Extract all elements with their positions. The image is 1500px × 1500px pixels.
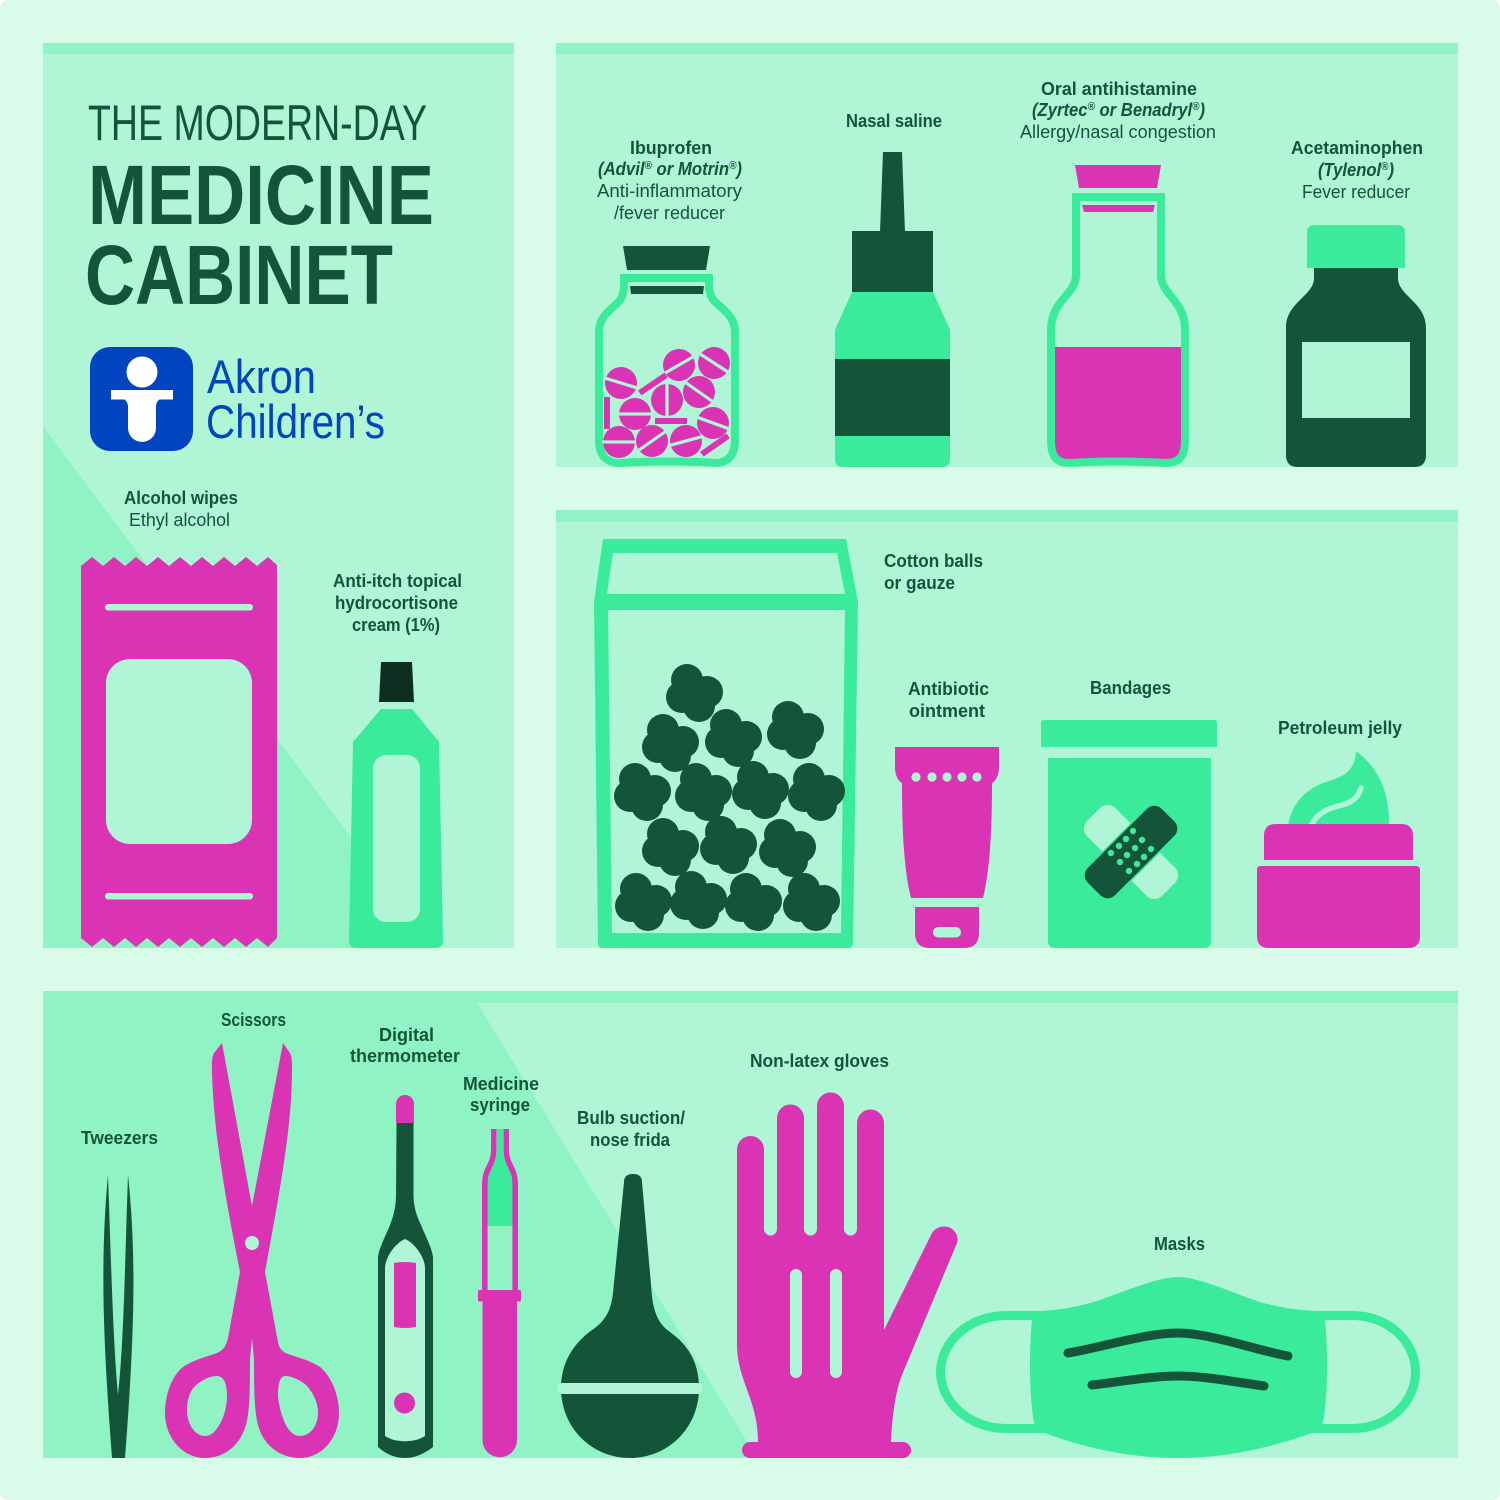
label: medicine syringe: syringe <box>470 1094 530 1115</box>
panel: medicines shelf <box>556 43 1458 467</box>
label: oral antihistamine: Oral antihistamine <box>1041 78 1197 99</box>
label: tweezers: Tweezers <box>81 1127 158 1148</box>
label: medicine syringe: Medicine <box>463 1073 539 1094</box>
icon: alcohol wipes packet <box>81 557 277 947</box>
icon: face mask <box>940 1277 1416 1458</box>
label: nasal saline: Nasal saline <box>846 110 942 131</box>
label: acetaminophen: ® <box>1381 161 1389 173</box>
label: oral antihistamine <box>1020 78 1216 142</box>
icon: pill jar <box>599 246 737 464</box>
icon: ointment tube <box>895 747 999 948</box>
label: oral antihistamine: ® <box>1192 101 1200 113</box>
panel: title and wipes <box>43 43 514 948</box>
label: oral antihistamine: or Benadryl <box>1095 99 1193 120</box>
label: anti-itch cream: cream (1%) <box>352 614 440 635</box>
label: acetaminophen: ) <box>1387 159 1394 180</box>
label: antibiotic ointment: ointment <box>909 700 985 721</box>
label: acetaminophen: Acetaminophen <box>1291 137 1423 158</box>
label: medicine syringe <box>463 1073 539 1115</box>
icon: hydrocortisone tube <box>349 662 443 948</box>
label: cotton balls <box>884 550 983 593</box>
label: oral antihistamine: (Zyrtec <box>1032 99 1094 120</box>
label: ibuprofen: ® <box>729 160 737 172</box>
label: alcohol wipes: Alcohol wipes <box>124 487 238 508</box>
panel: tools shelf <box>43 991 1458 1458</box>
label: anti-itch cream: Anti-itch topical <box>333 570 462 591</box>
label: digital thermometer: Digital <box>379 1024 434 1045</box>
panel: first-aid shelf <box>556 510 1458 948</box>
label: ibuprofen <box>597 137 743 223</box>
label: anti-itch cream <box>333 570 462 635</box>
icon: nasal saline bottle <box>835 152 950 467</box>
label: oral antihistamine: ) <box>1198 99 1205 120</box>
label: digital thermometer <box>350 1024 460 1066</box>
title: THE MODERN-DAY <box>88 95 427 151</box>
icon: tweezers <box>103 1175 133 1458</box>
label: bulb suction: nose frida <box>590 1129 671 1150</box>
label: alcohol wipes: Ethyl alcohol <box>129 509 230 530</box>
title: MEDICINE <box>88 148 434 242</box>
icon: bulb suction <box>557 1174 703 1458</box>
icon: cotton balls jar <box>594 539 858 948</box>
label: bulb suction: Bulb suction/ <box>577 1107 685 1128</box>
label: bandages: Bandages <box>1090 677 1171 698</box>
icon: antihistamine bottle <box>1051 165 1185 463</box>
icon: bandage box <box>1041 720 1217 948</box>
label: non-latex gloves: Non-latex gloves <box>750 1050 889 1071</box>
label: ibuprofen: Anti-inflammatory <box>597 180 743 201</box>
label: antibiotic ointment: Antibiotic <box>908 678 989 699</box>
logo: Akron Children's: Children’s <box>206 395 385 448</box>
logo: Akron Children's <box>90 347 385 451</box>
title <box>85 95 434 322</box>
icon: digital thermometer <box>378 1095 433 1458</box>
label: ibuprofen: ® <box>645 160 653 172</box>
label: ibuprofen: /fever reducer <box>614 202 725 223</box>
label: cotton balls: Cotton balls <box>884 550 983 571</box>
icon: scissors <box>165 1043 339 1458</box>
label: ibuprofen: or Motrin <box>652 158 729 179</box>
icon: glove <box>737 1092 958 1458</box>
label: scissors: Scissors <box>221 1009 286 1030</box>
label: alcohol wipes <box>124 487 238 530</box>
label: cotton balls: or gauze <box>884 572 955 593</box>
icon: medicine syringe <box>478 1129 521 1457</box>
label: petroleum jelly: Petroleum jelly <box>1278 717 1403 738</box>
label: masks: Masks <box>1154 1233 1205 1254</box>
label: acetaminophen: (Tylenol <box>1318 159 1388 180</box>
label: anti-itch cream: hydrocortisone <box>335 592 458 613</box>
label: acetaminophen: Fever reducer <box>1302 181 1410 202</box>
label: digital thermometer: thermometer <box>350 1045 460 1066</box>
icon: acetaminophen bottle <box>1286 225 1426 467</box>
label: ibuprofen: (Advil <box>598 158 649 179</box>
label: antibiotic ointment <box>908 678 989 721</box>
icon: petroleum jelly jar <box>1257 751 1420 948</box>
label: bulb suction <box>577 1107 685 1150</box>
label: acetaminophen <box>1291 137 1423 202</box>
title: CABINET <box>85 228 393 322</box>
label: oral antihistamine: ® <box>1088 101 1096 113</box>
label: oral antihistamine: Allergy/nasal congestion <box>1020 121 1216 142</box>
label: ibuprofen: ) <box>735 158 742 179</box>
label: ibuprofen: Ibuprofen <box>630 137 712 158</box>
logo: Akron Children's: Akron <box>207 350 316 403</box>
